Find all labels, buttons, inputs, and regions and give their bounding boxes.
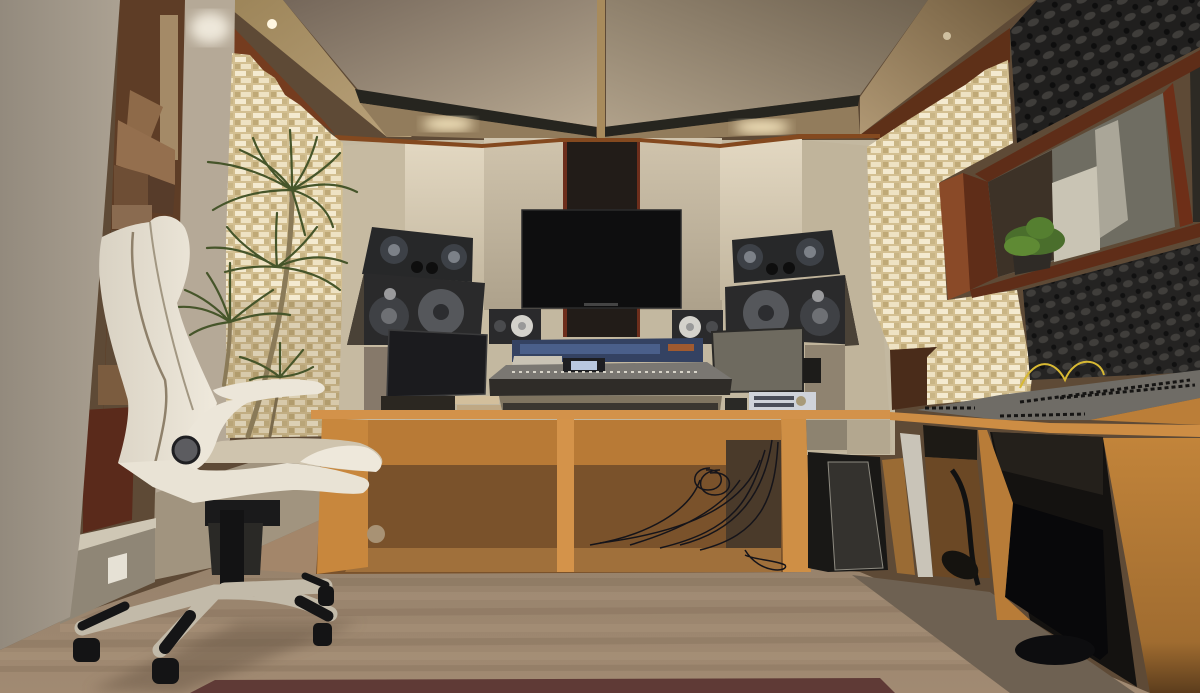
audio interface bbox=[725, 392, 816, 413]
chair seat bbox=[118, 438, 382, 503]
back wall bbox=[335, 134, 895, 455]
left laptop screen bbox=[381, 330, 501, 412]
cables under desk bbox=[590, 440, 786, 570]
desk bbox=[311, 410, 890, 574]
rack and equipment bbox=[808, 425, 990, 578]
ceiling lights bbox=[267, 19, 951, 134]
potted plant on window sill bbox=[1004, 217, 1065, 275]
small nearfield speakers bbox=[489, 309, 723, 344]
foam diffuser: right bbox=[867, 60, 1032, 405]
mixing console bbox=[489, 338, 732, 411]
door niche bbox=[890, 347, 937, 410]
speakers: right stack bbox=[725, 230, 859, 346]
right laptop screen bbox=[712, 328, 821, 392]
plant bbox=[178, 130, 357, 436]
chair back bbox=[99, 216, 217, 487]
ceiling bbox=[220, 0, 1035, 150]
chair armrest bbox=[173, 379, 325, 470]
speakers: left stack bbox=[347, 227, 485, 345]
chair knob bbox=[173, 437, 199, 463]
floor bbox=[0, 520, 1150, 693]
office chair bbox=[73, 216, 382, 684]
main monitor bbox=[522, 210, 681, 308]
chair base bbox=[73, 500, 334, 684]
left wall bbox=[0, 0, 320, 650]
right console desk bbox=[890, 362, 1200, 693]
foam diffuser: left bbox=[226, 53, 343, 438]
right wall with acoustic foam and window bbox=[939, 0, 1200, 380]
